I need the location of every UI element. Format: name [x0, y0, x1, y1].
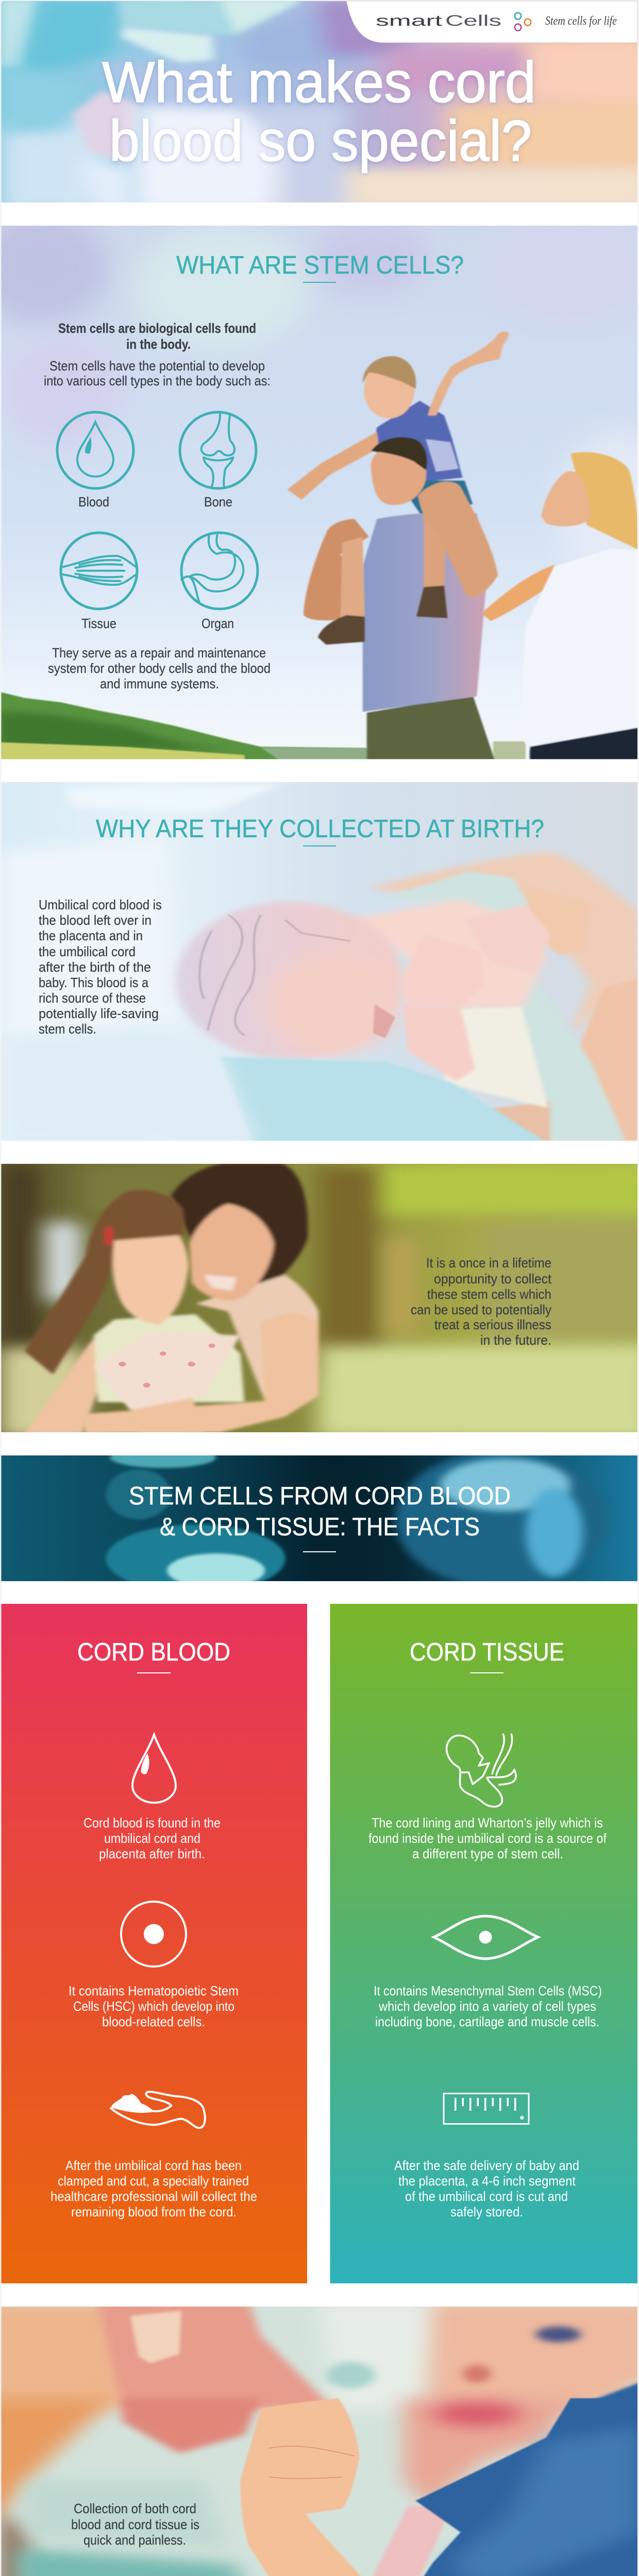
caption: these stem cells which	[427, 1286, 551, 1302]
hero title: What makes cord	[102, 50, 536, 114]
man's forearm	[418, 482, 498, 597]
text: collection: After the umbilical cord has been	[65, 2158, 242, 2173]
heading: WHAT ARE STEM CELLS?	[176, 251, 464, 279]
caption: in the future.	[480, 1332, 551, 1348]
heading: WHY ARE THEY COLLECTED AT BIRTH?	[96, 815, 544, 843]
label: organ: Organ	[201, 616, 234, 631]
intro text: Stem cells are biological cells found	[58, 320, 256, 336]
caption: can be used to potentially	[411, 1302, 551, 1317]
caption: quick and painless.	[83, 2532, 186, 2548]
icon: blood	[57, 412, 133, 488]
text: cord lining: The cord lining and Wharton’s jelly which is	[372, 1815, 603, 1831]
jellyfish photo	[0, 1447, 639, 1593]
text: location	[83, 1815, 221, 1861]
panel: facts banner	[0, 1447, 639, 1593]
banner heading: & CORD TISSUE: THE FACTS	[160, 1513, 480, 1541]
closing text	[48, 645, 271, 691]
banner heading	[129, 1482, 511, 1552]
newborn photo	[0, 782, 639, 1146]
heading: CORD TISSUE	[410, 1638, 564, 1666]
paragraph: baby. This blood is a	[39, 975, 148, 990]
text: storage: safely stored.	[450, 2204, 523, 2219]
icon: organ	[181, 533, 258, 609]
boy legs	[318, 504, 447, 645]
text: storage: the placenta, a 4-6 inch segment	[398, 2173, 576, 2189]
text: HSC: Cells (HSC) which develop into	[73, 1998, 234, 2014]
panel: cord tissue	[330, 1604, 637, 2283]
hero title: blood so special?	[109, 109, 532, 173]
text: HSC: blood-related cells.	[102, 2014, 205, 2029]
text: location: umbilical cord and	[104, 1831, 200, 1846]
caption: opportunity to collect	[434, 1271, 552, 1286]
icon: ruler	[444, 2094, 529, 2124]
closing text: They serve as a repair and maintenance	[52, 645, 266, 660]
panel: quick and painless	[0, 2301, 639, 2576]
label: bone: Bone	[204, 494, 232, 510]
logo tagline: Stem cells for life	[545, 14, 617, 28]
text: collection	[51, 2158, 257, 2219]
hero abstract crystal background	[0, 0, 639, 210]
baby hand photo	[0, 2301, 639, 2576]
text: location: Cord blood is found in the	[83, 1815, 221, 1831]
intro text: into various cell types in the body such as:	[44, 373, 271, 388]
woman	[481, 452, 639, 761]
caption: blood and cord tissue is	[71, 2517, 199, 2532]
text: cord lining: found inside the umbilical cord is a source of	[368, 1831, 607, 1846]
icon: tissue	[61, 533, 137, 609]
heading: CORD BLOOD	[77, 1638, 230, 1666]
icon: hand	[111, 2092, 205, 2128]
panel: why collected at birth	[0, 782, 639, 1146]
caption: Collection of both cord	[74, 2501, 196, 2516]
hero title	[102, 50, 536, 173]
closing text: and immune systems.	[100, 676, 219, 691]
icon: mesenchymal cell	[434, 1916, 538, 1959]
banner heading: STEM CELLS FROM CORD BLOOD	[129, 1482, 511, 1510]
paragraph: the blood left over in	[39, 912, 152, 928]
text: MSC: which develop into a variety of cell types	[378, 1998, 596, 2014]
text: storage: After the safe delivery of baby and	[394, 2158, 579, 2173]
icon: bone	[180, 412, 256, 488]
flower bunch	[94, 1333, 241, 1410]
paragraph: after the birth of the	[39, 959, 151, 975]
icon: drop	[132, 1735, 176, 1803]
paragraph: the umbilical cord	[39, 944, 136, 959]
paragraph: stem cells.	[39, 1021, 96, 1037]
text: MSC: It contains Mesenchymal Stem Cells (MSC)	[374, 1983, 602, 1998]
label: tissue: Tissue	[81, 616, 116, 631]
white logo tab	[346, 1, 637, 43]
paragraph: Umbilical cord blood is	[39, 897, 162, 912]
panel: cord blood	[1, 1604, 307, 2283]
paragraph: the placenta and in	[39, 928, 143, 943]
caption: It is a once in a lifetime	[426, 1255, 551, 1270]
paragraph: rich source of these	[39, 990, 146, 1006]
blue blanket	[220, 1057, 548, 1143]
icon: fetus and umbilical cord	[447, 1734, 516, 1807]
text: HSC	[69, 1983, 239, 2029]
intro text: Stem cells have the potential to develop	[49, 358, 265, 374]
text: storage	[394, 2158, 579, 2219]
text: MSC: including bone, cartilage and muscle cells.	[375, 2014, 599, 2029]
text: collection: healthcare professional will collect the	[51, 2189, 257, 2204]
mother	[81, 1163, 318, 1434]
man	[304, 437, 495, 761]
caption: treat a serious illness	[434, 1317, 551, 1332]
paragraph: potentially life-saving	[39, 1006, 159, 1021]
text: HSC: It contains Hematopoietic Stem	[69, 1983, 239, 1998]
baby head	[176, 902, 402, 1059]
boy upper body	[288, 332, 509, 516]
text: cord lining	[368, 1815, 607, 1861]
caption	[71, 2501, 199, 2548]
caption	[411, 1255, 552, 1348]
text: MSC	[374, 1983, 602, 2029]
panel: hero header	[0, 0, 639, 210]
logo wordmark: smart	[376, 12, 443, 29]
closing text: system for other body cells and the blood	[48, 660, 271, 676]
label: blood: Blood	[78, 494, 109, 510]
text: storage: of the umbilical cord is cut and	[405, 2189, 568, 2204]
paragraph	[39, 897, 162, 1037]
intro text: in the body.	[126, 336, 191, 352]
text: cord lining: a different type of stem cell.	[412, 1846, 563, 1861]
logo wordmark	[376, 12, 501, 29]
icon: blood cell	[121, 1902, 186, 1967]
logo wordmark: Cells	[445, 12, 501, 29]
text: location: placenta after birth.	[99, 1846, 205, 1861]
intro text	[44, 320, 271, 388]
logo circles	[515, 12, 531, 31]
family photo with sky background	[0, 211, 639, 761]
mother and daughter photo	[0, 1163, 639, 1438]
panel: once in a lifetime	[0, 1163, 639, 1438]
girl	[24, 1190, 244, 1434]
trees and field	[0, 692, 526, 761]
text: collection: remaining blood from the cord.	[71, 2204, 237, 2219]
panel: what are stem cells	[0, 211, 639, 761]
text: collection: clamped and cut, a specially trained	[58, 2173, 249, 2189]
